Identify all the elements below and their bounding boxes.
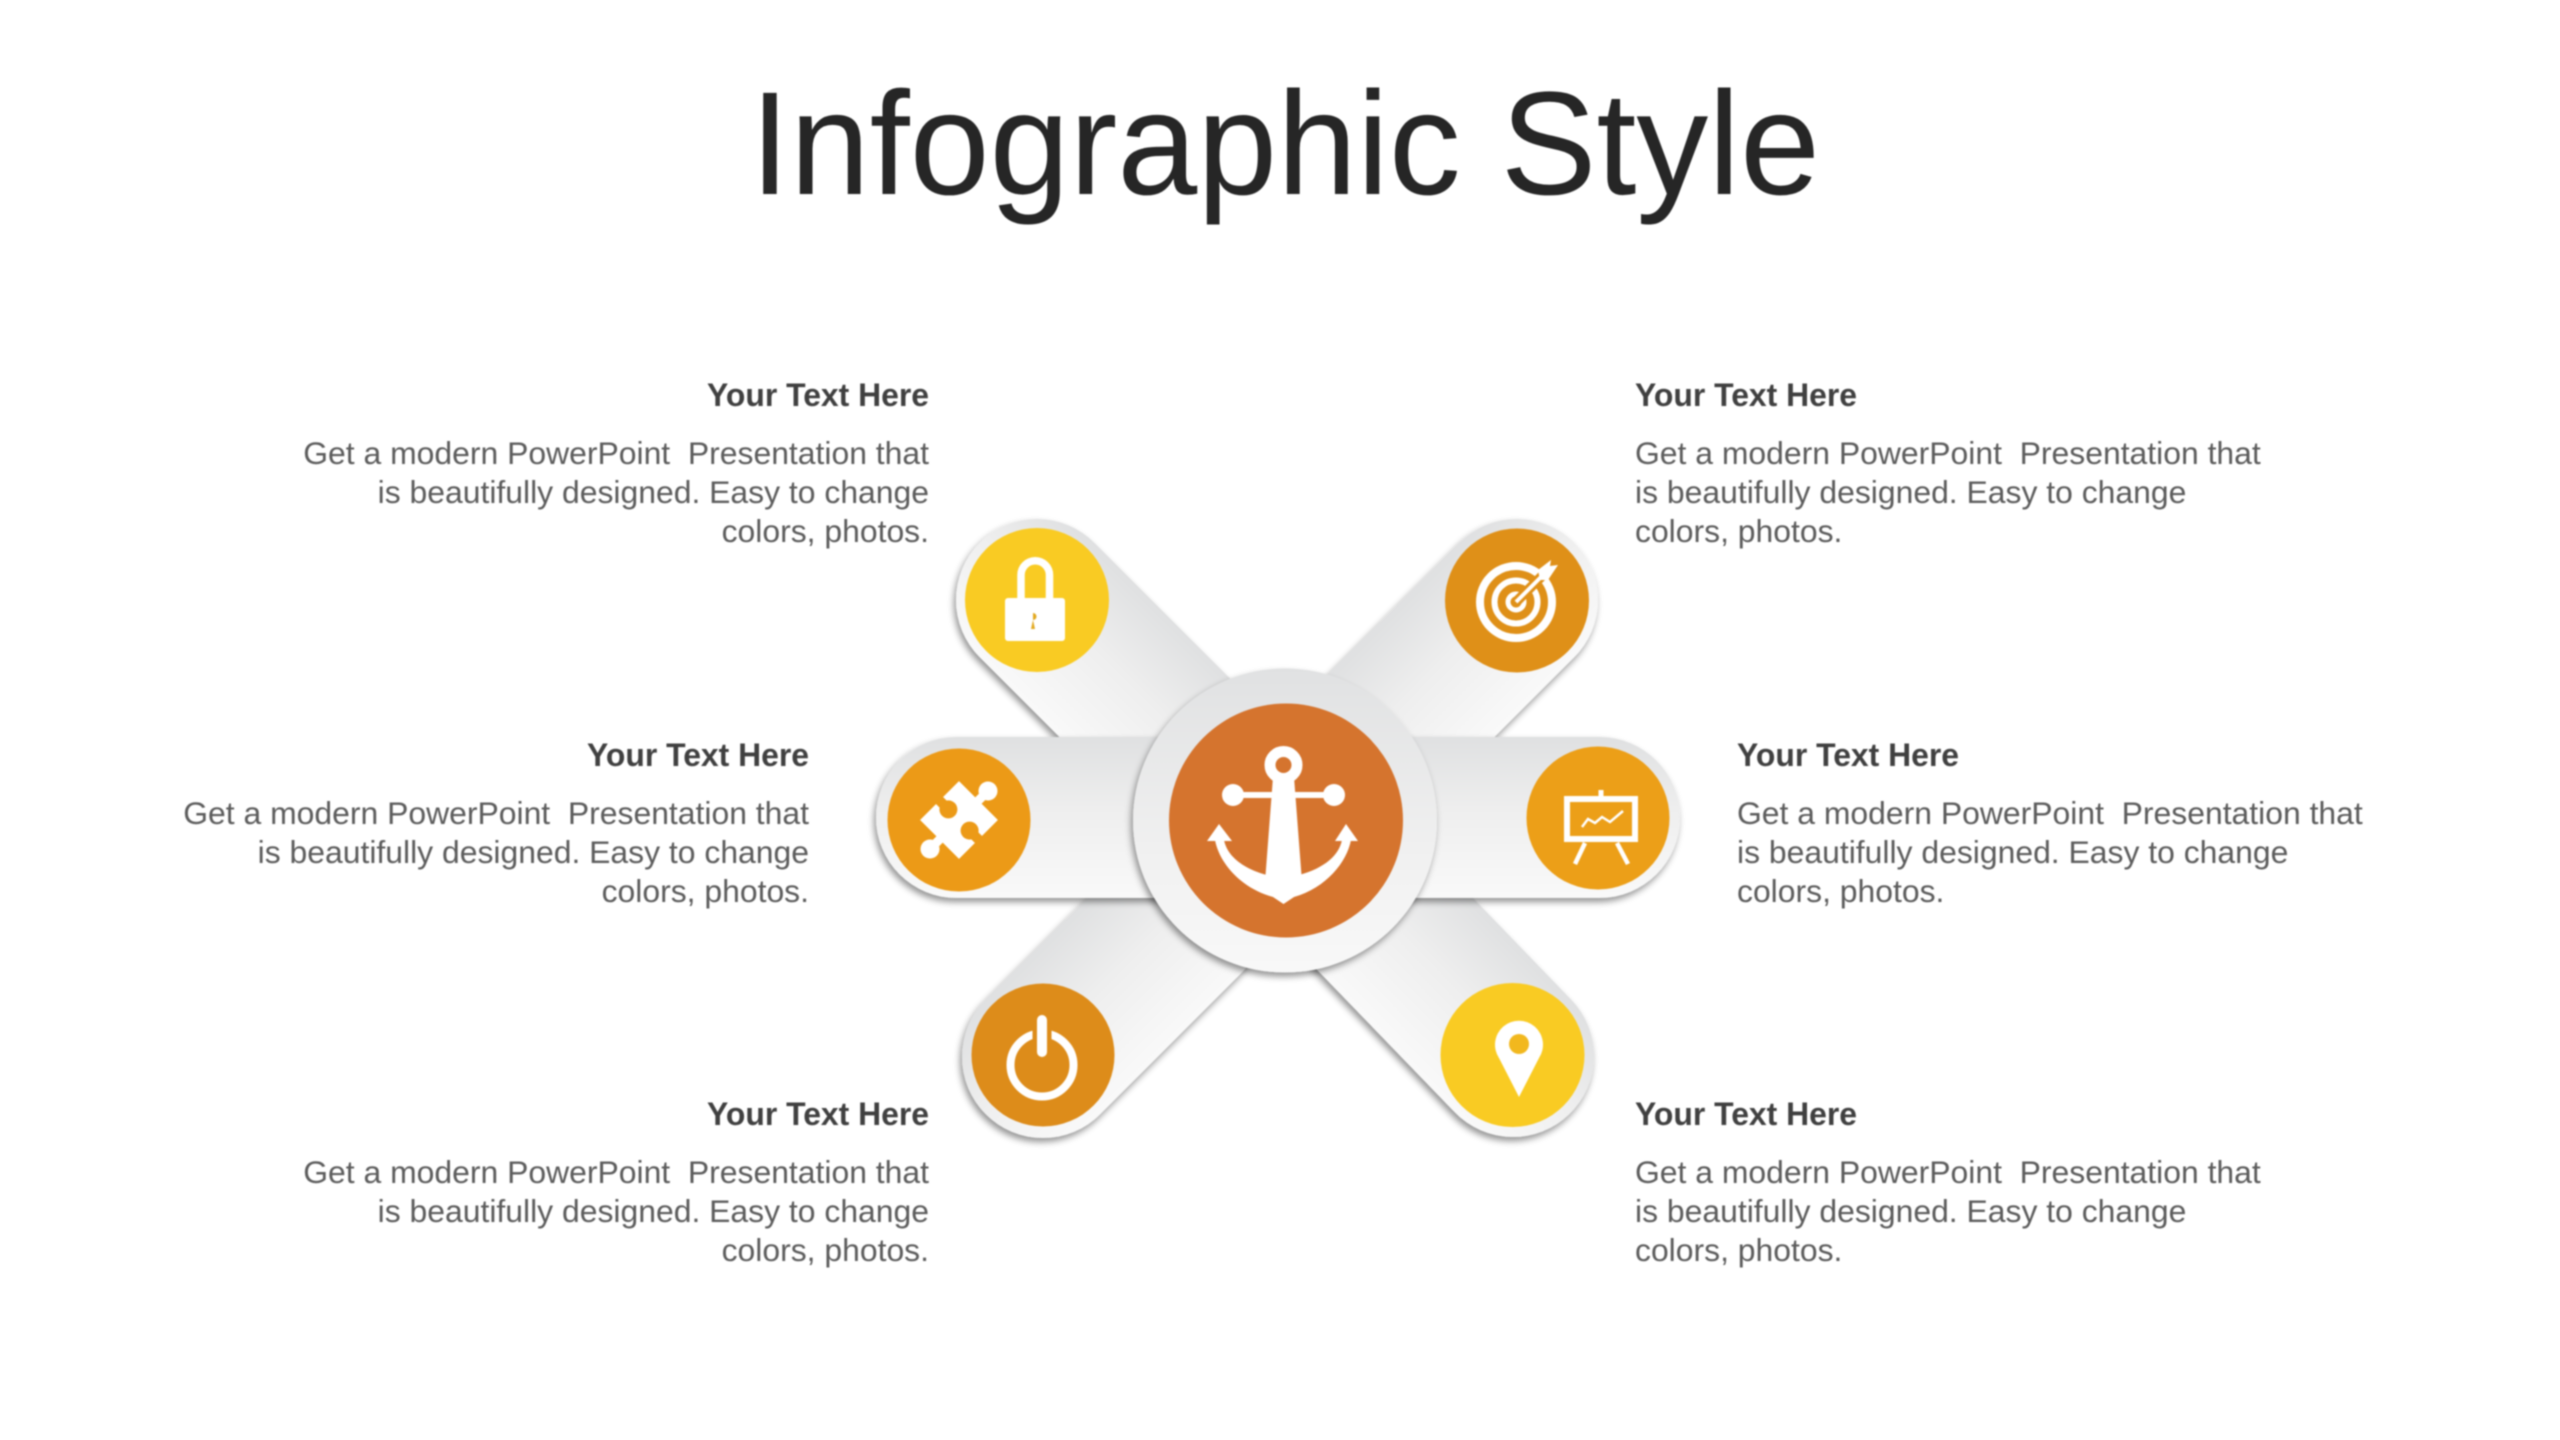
body: bottom left: is beautifully designed. Easy to change bbox=[378, 1193, 929, 1229]
body: middle right: colors, photos. bbox=[1737, 873, 1944, 909]
badge: power bbox=[972, 984, 1114, 1126]
body: top right: colors, photos. bbox=[1635, 513, 1842, 549]
icon: power symbol bbox=[1010, 1015, 1074, 1096]
badge: pin bbox=[1440, 983, 1584, 1127]
body: bottom right: is beautifully designed. Easy to change bbox=[1635, 1193, 2186, 1229]
icon: puzzle piece bbox=[903, 764, 1015, 876]
body: middle left: is beautifully designed. Easy to change bbox=[258, 834, 809, 870]
body: top left: is beautifully designed. Easy to change bbox=[378, 474, 929, 510]
body: middle left: Get a modern PowerPoint Presentation that bbox=[183, 795, 809, 831]
icon: lock bbox=[1005, 561, 1065, 641]
text block: bottom left bbox=[303, 1096, 929, 1268]
body: top left: colors, photos. bbox=[722, 513, 929, 549]
icon: presentation board bbox=[1567, 790, 1635, 864]
badge: target bbox=[1445, 528, 1589, 672]
text block: middle right bbox=[1737, 737, 2363, 909]
center badge: anchor bbox=[1169, 704, 1403, 938]
body: middle right: is beautifully designed. Easy to change bbox=[1737, 834, 2288, 870]
badge: lock bbox=[965, 528, 1109, 672]
hub diagram bbox=[876, 485, 1680, 1172]
heading: middle left: Your Text Here bbox=[587, 737, 809, 773]
body: top right: Get a modern PowerPoint Presentation that bbox=[1635, 435, 2261, 471]
text block: middle left bbox=[183, 737, 809, 909]
arm: lock bbox=[922, 485, 1292, 855]
title: Infographic Style bbox=[750, 62, 1820, 226]
body: bottom left: Get a modern PowerPoint Presentation that bbox=[303, 1154, 929, 1190]
arm: power bbox=[928, 802, 1298, 1172]
body: middle left: colors, photos. bbox=[602, 873, 809, 909]
body: top left: Get a modern PowerPoint Presentation that bbox=[303, 435, 929, 471]
arm: presentation board bbox=[1270, 737, 1680, 898]
icon: target bbox=[1480, 560, 1558, 638]
icon: map pin bbox=[1495, 1021, 1543, 1097]
arm: target bbox=[1262, 485, 1632, 855]
body: bottom left: colors, photos. bbox=[722, 1232, 929, 1268]
icon: anchor bbox=[1207, 752, 1358, 904]
body: bottom right: colors, photos. bbox=[1635, 1232, 1842, 1268]
heading: bottom right: Your Text Here bbox=[1635, 1096, 1857, 1132]
badge: puzzle bbox=[888, 748, 1030, 892]
heading: top left: Your Text Here bbox=[707, 377, 929, 413]
arm: pin bbox=[1261, 799, 1628, 1171]
badge: presentation board bbox=[1526, 746, 1670, 890]
body: middle right: Get a modern PowerPoint Presentation that bbox=[1737, 795, 2363, 831]
body: bottom right: Get a modern PowerPoint Presentation that bbox=[1635, 1154, 2261, 1190]
text block: top left bbox=[303, 377, 929, 549]
text block: bottom right bbox=[1635, 1096, 2261, 1268]
heading: middle right: Your Text Here bbox=[1737, 737, 1959, 773]
text block: top right bbox=[1635, 377, 2261, 549]
arm: puzzle bbox=[876, 737, 1296, 898]
heading: top right: Your Text Here bbox=[1635, 377, 1857, 413]
heading: bottom left: Your Text Here bbox=[707, 1096, 929, 1132]
center ring bbox=[1133, 668, 1437, 972]
body: top right: is beautifully designed. Easy to change bbox=[1635, 474, 2186, 510]
